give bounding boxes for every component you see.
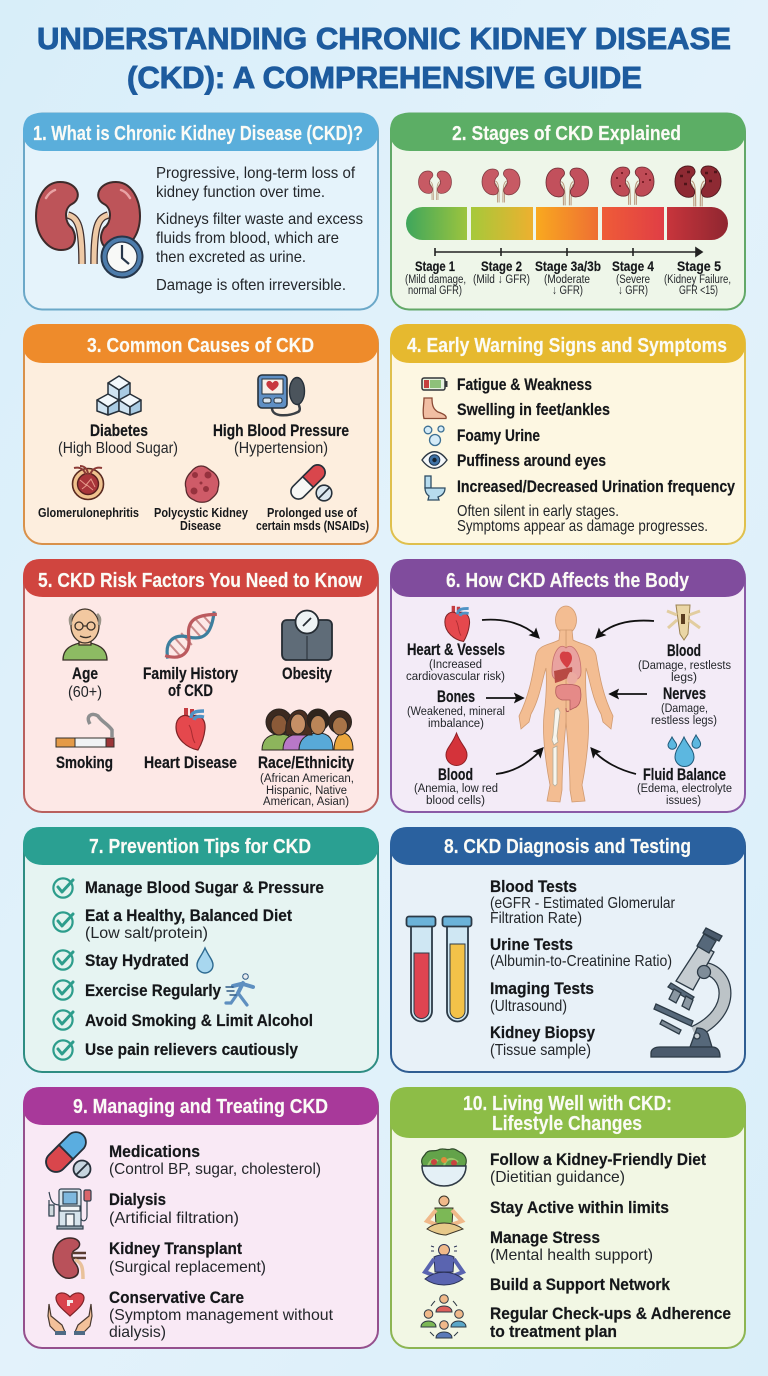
list: lifestyle changes: (Mental health support) [490, 1247, 653, 1264]
list: treatment options: (Surgical replacement) [109, 1259, 266, 1276]
icon: nerve [667, 605, 700, 640]
icon: test tubes [406, 916, 472, 1022]
icon: care hands with heart [48, 1293, 92, 1335]
text: CKD definition: fluids from blood, which are [156, 230, 339, 247]
heading: diagnosis [390, 827, 745, 865]
icon: runner [226, 974, 253, 1005]
list: lifestyle changes: Build a Support Network [490, 1276, 671, 1294]
icon: kidney transplant [53, 1238, 86, 1279]
text: body effects: Bones [437, 688, 475, 706]
panel: managing and treating [23, 1087, 378, 1348]
list: treatment options [109, 1143, 334, 1341]
icon: support network [421, 1295, 466, 1338]
icon: human body with organs [519, 606, 613, 802]
heading: living well: 10. Living Well with CKD: [463, 1093, 672, 1115]
text: body effects: blood cells) [426, 793, 485, 807]
list: treatment options: Medications [109, 1143, 200, 1161]
text: CKD definition [156, 165, 363, 294]
text: body effects: legs) [671, 670, 697, 684]
heading: treatment: 9. Managing and Treating CKD [73, 1096, 328, 1118]
icon: older man [63, 609, 107, 660]
icon: sugar cubes [97, 376, 141, 415]
list: treatment options: dialysis) [109, 1324, 166, 1341]
labels: stages: (Severe [616, 272, 650, 286]
labels: stages: ↓ GFR) [552, 283, 583, 297]
list: prevention tips: Manage Blood Sugar & Pressure [85, 879, 324, 897]
list: tests: (eGFR - Estimated Glomerular [490, 895, 676, 912]
labels: stages: (Moderate [544, 272, 590, 286]
text: causes: High Blood Pressure [213, 422, 349, 440]
heading: warning signs [390, 324, 745, 363]
list: treatment options: Kidney Transplant [109, 1240, 242, 1258]
list: prevention tips: Avoid Smoking & Limit Alcohol [85, 1012, 313, 1030]
icon: cigarette [56, 714, 114, 747]
text: body effects: Blood [438, 766, 473, 784]
text: CKD definition: then excreted as urine. [156, 249, 306, 266]
text: risk factors: Obesity [282, 665, 333, 683]
icon: water drops [668, 735, 701, 766]
list: treatment options: Conservative Care [109, 1289, 244, 1307]
text: body effects: Heart & Vessels [407, 641, 505, 659]
labels: stages: ↓ GFR) [618, 283, 648, 297]
list: prevention tips: Use pain relievers cautiously [85, 1041, 299, 1059]
panel: prevention tips [23, 827, 378, 1072]
title: UNDERSTANDING CHRONIC KIDNEY DISEASE [37, 22, 731, 56]
heading: causes: 3. Common Causes of CKD [87, 335, 314, 357]
text: causes: Diabetes [90, 422, 148, 440]
heading: risk factors [23, 559, 378, 597]
list: tests: (Ultrasound) [490, 998, 567, 1015]
text: body effects: Nerves [663, 685, 706, 703]
list: lifestyle changes: to treatment plan [490, 1323, 617, 1341]
text: risk factors: Heart Disease [144, 754, 237, 772]
list: prevention tips: (Low salt/protein) [85, 925, 208, 942]
icon: swollen foot [423, 398, 446, 418]
heading: body effects: 6. How CKD Affects the Body [446, 570, 690, 592]
list: tests: (Tissue sample) [490, 1042, 591, 1059]
text: risk factors [56, 665, 355, 808]
text: risk factors: American, Asian) [263, 794, 349, 808]
chart: stage gradient bar [406, 207, 728, 240]
text: causes: (Hypertension) [234, 440, 328, 457]
text: body effects: issues) [666, 793, 701, 807]
arrow: stage axis [435, 248, 702, 256]
icon: bathroom scale [282, 610, 332, 660]
text: risk factors: Hispanic, Native [266, 783, 347, 797]
labels: stages [405, 259, 731, 297]
icon: stage kidneys [418, 166, 721, 206]
text: body effects: (Damage, restlests [638, 658, 731, 672]
icon: pills [288, 462, 332, 502]
text: body effects [406, 641, 732, 807]
heading: living well [390, 1087, 745, 1138]
list: lifestyle changes: Manage Stress [490, 1229, 600, 1247]
list: prevention tips: Eat a Healthy, Balanced Diet [85, 907, 292, 925]
icon: eye [422, 452, 447, 468]
labels: stages: Stage 5 [677, 259, 721, 274]
list: treatment options: (Control BP, sugar, cholesterol) [109, 1161, 321, 1178]
text: body effects: (Weakened, mineral [407, 704, 505, 718]
heading: stages: 2. Stages of CKD Explained [452, 123, 681, 145]
list: treatment options: (Artificial filtration) [109, 1210, 239, 1227]
icon: polycystic kidney [185, 466, 219, 502]
text: body effects: Fluid Balance [643, 766, 726, 784]
list: symptoms [457, 376, 736, 535]
icon: pills [42, 1128, 90, 1178]
list: lifestyle changes: Follow a Kidney-Friendly Diet [490, 1151, 706, 1169]
labels: stages: Stage 2 [481, 259, 522, 274]
list: lifestyle changes [490, 1151, 731, 1341]
panel: effects on the body [390, 559, 745, 812]
list: symptoms: Symptoms appear as damage progresses. [457, 518, 708, 535]
list: tests: Filtration Rate) [490, 910, 582, 927]
list: treatment options: (Symptom management without [109, 1307, 334, 1324]
arrows: effects pointing at body [482, 620, 654, 774]
text: body effects: (Edema, electrolyte [637, 781, 732, 795]
labels: stages: Stage 4 [612, 259, 654, 274]
text: risk factors: of CKD [168, 682, 213, 700]
text: risk factors: Family History [143, 665, 239, 683]
text: body effects: Blood [667, 642, 701, 660]
icons: check marks [53, 878, 73, 1060]
text: causes: (High Blood Sugar) [58, 440, 178, 457]
heading: stages [390, 113, 745, 151]
text: CKD definition: Progressive, long-term loss of [156, 165, 356, 182]
icon: DNA helix [160, 606, 222, 664]
labels: stages: Stage 3a/3b [535, 259, 601, 274]
text: risk factors: (60+) [68, 684, 102, 701]
list: lifestyle changes: Regular Check-ups & Adherence [490, 1305, 731, 1323]
icon: person in yoga pose [427, 1196, 463, 1235]
list: treatment options: Dialysis [109, 1191, 166, 1209]
list: symptoms: Swelling in feet/ankles [457, 401, 610, 419]
icon: low battery [422, 378, 448, 390]
list: lifestyle changes: (Dietitian guidance) [490, 1169, 625, 1186]
list: tests: Urine Tests [490, 936, 573, 954]
text: risk factors: Race/Ethnicity [258, 754, 355, 772]
heading: what is CKD: 1. What is Chronic Kidney Disease (CKD)? [33, 123, 363, 145]
icon: heart [176, 708, 205, 750]
text: body effects: cardiovascular risk) [406, 669, 505, 683]
heading: warning signs: 4. Early Warning Signs and Symptoms [407, 335, 727, 357]
text: risk factors: (African American, [260, 771, 354, 785]
text: causes: Glomerulonephritis [38, 506, 139, 520]
text: CKD definition: Kidneys filter waste and excess [156, 211, 363, 228]
list: tests: Blood Tests [490, 878, 577, 896]
icon: blood drop [446, 733, 467, 766]
list: tests [490, 878, 676, 1059]
heading: risk factors: 5. CKD Risk Factors You Need to Know [38, 570, 362, 592]
list: symptoms: Fatigue & Weakness [457, 376, 592, 394]
list: tests: Kidney Biopsy [490, 1024, 596, 1042]
icon: meditating person [425, 1244, 463, 1285]
panel: diagnosis and testing [390, 827, 745, 1072]
list: prevention tips [85, 879, 324, 1059]
list: prevention tips: Exercise Regularly [85, 982, 222, 1000]
icon: group of people [262, 709, 353, 750]
icon: water drop [197, 948, 213, 973]
text: CKD definition: kidney function over time. [156, 184, 325, 201]
panel: living well [390, 1087, 745, 1348]
text: body effects: (Damage, [661, 701, 708, 715]
title: (CKD): A COMPREHENSIVE GUIDE [127, 61, 642, 95]
icon: microscope [651, 928, 725, 1057]
list: symptoms: Often silent in early stages. [457, 503, 619, 520]
icon: blood pressure monitor [258, 375, 304, 415]
icon: heart and vessels [445, 606, 470, 642]
text: CKD definition: Damage is often irreversible. [156, 277, 346, 294]
heading: living well: Lifestyle Changes [492, 1113, 642, 1135]
heading: what is CKD [23, 113, 378, 151]
heading: prevention [23, 827, 378, 865]
labels: stages: GFR <15) [679, 283, 718, 297]
heading: prevention: 7. Prevention Tips for CKD [89, 836, 311, 858]
icon: bubbles [424, 426, 444, 446]
text: body effects: imbalance) [428, 716, 484, 730]
text: body effects: restless legs) [651, 713, 717, 727]
panel: stages of CKD [390, 113, 745, 310]
heading: causes [23, 324, 378, 363]
icon: kidneys with clock [36, 182, 142, 278]
panel: risk factors [23, 559, 378, 812]
list: lifestyle changes: Stay Active within limits [490, 1199, 669, 1217]
labels: stages: normal GFR) [408, 283, 462, 297]
list: symptoms: Foamy Urine [457, 427, 540, 445]
heading: body effects [390, 559, 745, 597]
text: risk factors: Smoking [56, 754, 113, 772]
panel: warning signs [390, 324, 745, 544]
text: causes: Disease [180, 519, 221, 533]
heading: treatment [23, 1087, 378, 1125]
text: causes: certain msds (NSAIDs) [256, 519, 369, 533]
icon: salad bowl [422, 1149, 466, 1186]
labels: stages: Stage 1 [415, 259, 455, 274]
panel: what is CKD [23, 113, 378, 310]
text: body effects: (Increased [429, 657, 482, 671]
list: tests: Imaging Tests [490, 980, 594, 998]
labels: stages: (Mild damage, [405, 272, 466, 286]
icon: toilet [425, 476, 445, 500]
text: risk factors: Age [72, 665, 98, 683]
text: causes: Polycystic Kidney [154, 506, 248, 520]
labels: stages: (Mild ↓ GFR) [473, 272, 530, 286]
icon: dialysis machine [49, 1189, 91, 1229]
icon: glomerulus [72, 466, 104, 500]
text: causes: Prolonged use of [267, 506, 358, 520]
labels: stages: (Kidney Failure, [664, 272, 731, 286]
title [37, 22, 731, 95]
text: body effects: (Anemia, low red [414, 781, 498, 795]
list: tests: (Albumin-to-Creatinine Ratio) [490, 953, 672, 970]
heading: diagnosis: 8. CKD Diagnosis and Testing [444, 836, 691, 858]
panel: common causes [23, 324, 378, 544]
list: prevention tips: Stay Hydrated [85, 952, 189, 970]
list: symptoms: Puffiness around eyes [457, 452, 606, 470]
text: causes [38, 422, 369, 533]
